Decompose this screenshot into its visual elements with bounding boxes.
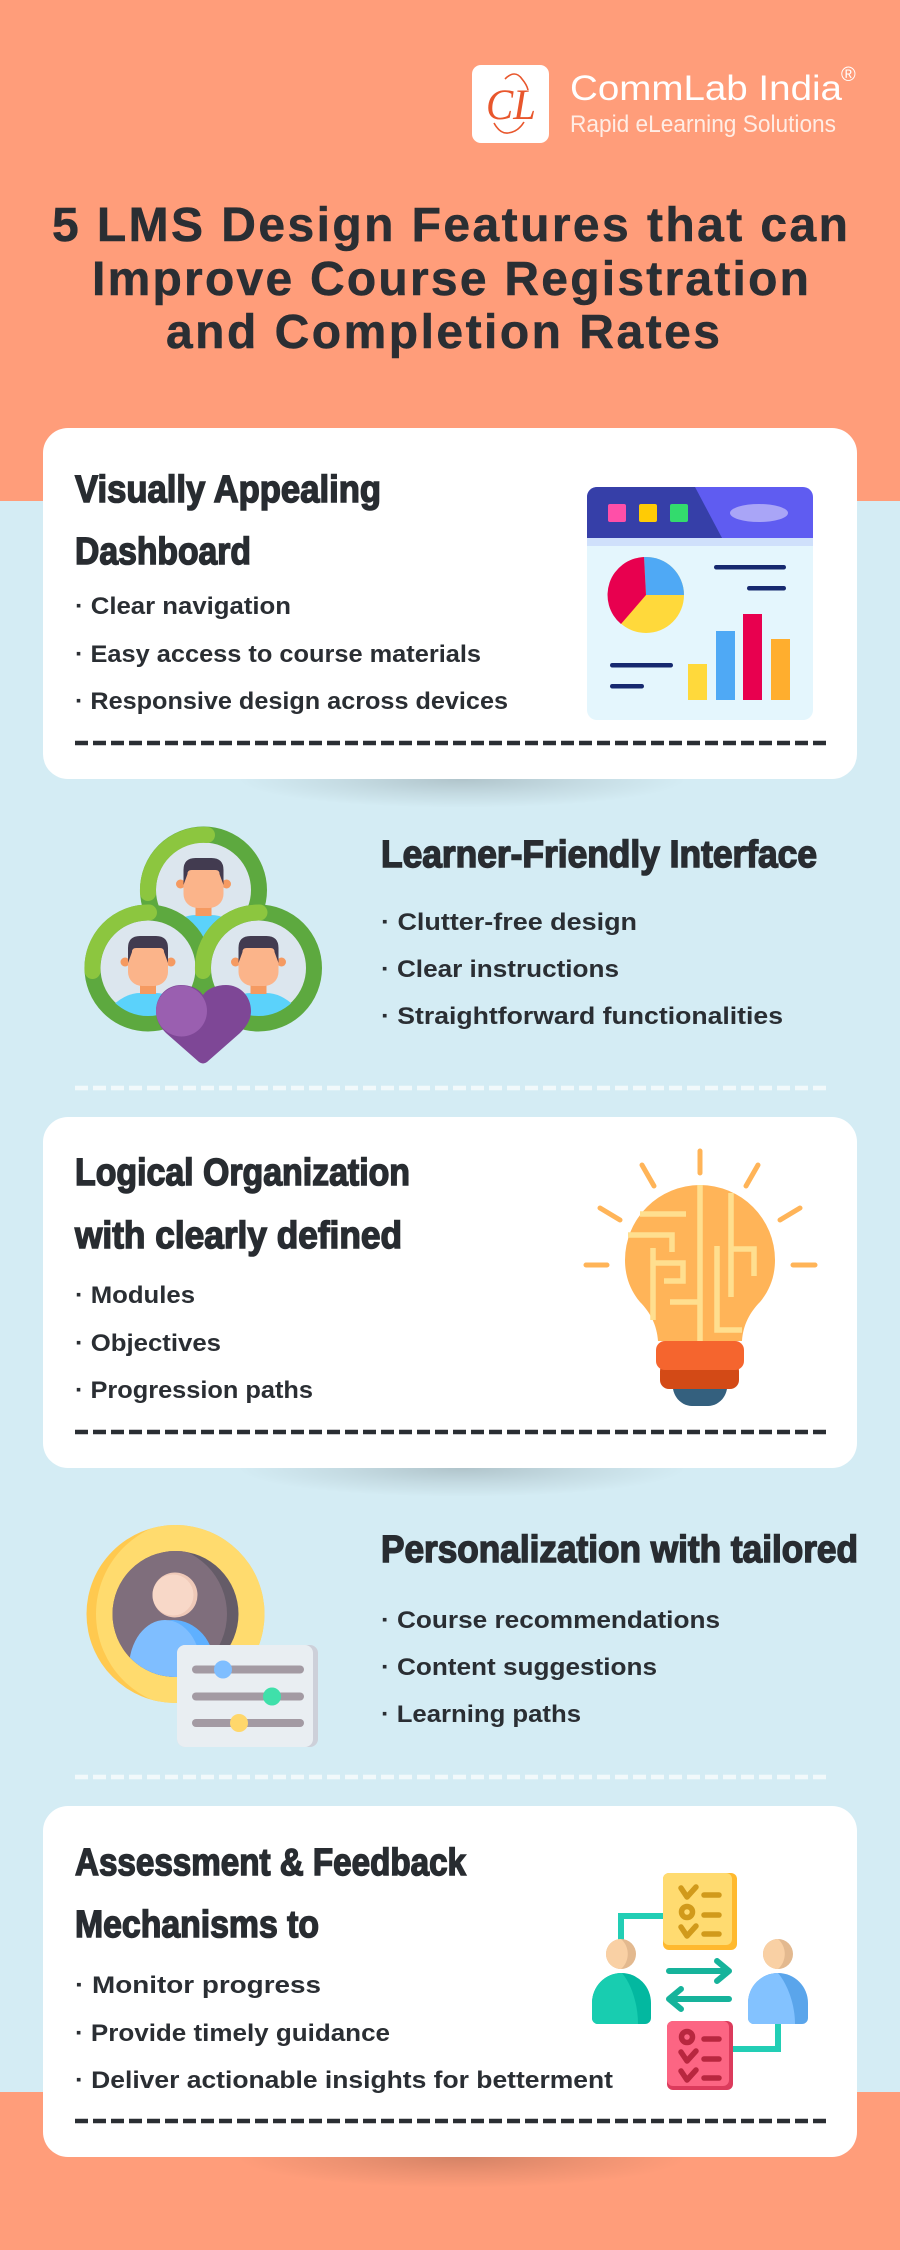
title	[52, 199, 848, 359]
shadow: card 3	[237, 1439, 687, 1497]
panel: logical organization	[43, 1117, 857, 1468]
bullet list: dashboard: · Responsive design across devices	[75, 688, 508, 715]
bullet list: personalization: · Learning paths	[381, 1701, 581, 1728]
bullet list: assessment: · Monitor progress	[75, 1972, 321, 1999]
logo: CommLab India: ®	[841, 64, 856, 86]
bullet list: dashboard: · Easy access to course materials	[75, 641, 481, 668]
title: 5 LMS Design Features that can	[52, 199, 848, 252]
bullet list: assessment: · Provide timely guidance	[75, 2020, 390, 2047]
heading: assessment and feedback	[75, 1842, 467, 1946]
left person	[592, 1939, 651, 2024]
heading: logical organization: Logical Organization	[75, 1152, 410, 1194]
heading: visually appealing dashboard: Visually Appealing	[75, 469, 381, 511]
logo: CommLab India: CL	[486, 82, 536, 129]
heading: personalization: Personalization with tailored	[381, 1529, 858, 1571]
bullet list: personalization: · Content suggestions	[381, 1654, 657, 1681]
heading: assessment and feedback: Assessment & Feedback	[75, 1842, 467, 1884]
heading: logical organization: with clearly defined	[74, 1215, 402, 1257]
icon: profile with settings sliders	[86, 1520, 318, 1747]
exchange arrows	[669, 1961, 729, 2009]
heading: visually appealing dashboard: Dashboard	[75, 531, 251, 573]
shadow: card 1	[237, 750, 687, 808]
light blue background band	[0, 501, 900, 2092]
bullet list: assessment	[75, 1972, 613, 2094]
icon: light bulb with circuit	[586, 1151, 815, 1406]
title: and Completion Rates	[166, 306, 720, 359]
bullet list: personalization: · Course recommendations	[381, 1607, 720, 1634]
logo: CommLab India: CommLab India	[570, 69, 843, 108]
bullet list: personalization	[381, 1607, 720, 1728]
heading: logical organization	[74, 1152, 410, 1257]
heading: learner-friendly interface: Learner-Friendly Interface	[381, 834, 817, 876]
bullet list: interface	[381, 909, 783, 1030]
icon: dashboard window	[587, 487, 813, 720]
bullet list: dashboard: · Clear navigation	[75, 593, 291, 620]
title: Improve Course Registration	[92, 253, 809, 306]
logo: CommLab India: Rapid eLearning Solutions	[570, 111, 836, 138]
bullet list: interface: · Straightforward functionalities	[381, 1003, 783, 1030]
pink checklist	[667, 2021, 733, 2090]
heading: assessment and feedback: Mechanisms to	[75, 1904, 319, 1946]
shadow: card 5	[237, 2126, 687, 2188]
right person	[748, 1939, 808, 2024]
section: personalization	[75, 1520, 858, 1777]
section: learner-friendly interface	[75, 834, 826, 1088]
panel: visually appealing dashboard	[43, 428, 857, 779]
icon: feedback exchange between two people	[592, 1873, 808, 2090]
bar chart	[688, 614, 790, 700]
heading: visually appealing dashboard	[75, 469, 381, 573]
panel: assessment and feedback	[43, 1806, 857, 2157]
bullet list: interface: · Clear instructions	[381, 956, 619, 983]
logo: CommLab India	[472, 64, 856, 143]
bullet list: organization: · Progression paths	[75, 1377, 313, 1404]
settings panel	[177, 1645, 318, 1747]
icon: three learners and heart	[92, 834, 314, 1064]
pie chart	[608, 557, 684, 633]
bullet list: organization: · Objectives	[75, 1330, 221, 1357]
bullet list: organization: · Modules	[75, 1282, 195, 1309]
bullet list: assessment: · Deliver actionable insights for betterment	[75, 2067, 613, 2094]
bullet list: interface: · Clutter-free design	[381, 909, 637, 936]
bullet list: dashboard	[75, 593, 508, 715]
yellow checklist	[663, 1873, 737, 1950]
bullet list: organization	[75, 1282, 313, 1404]
